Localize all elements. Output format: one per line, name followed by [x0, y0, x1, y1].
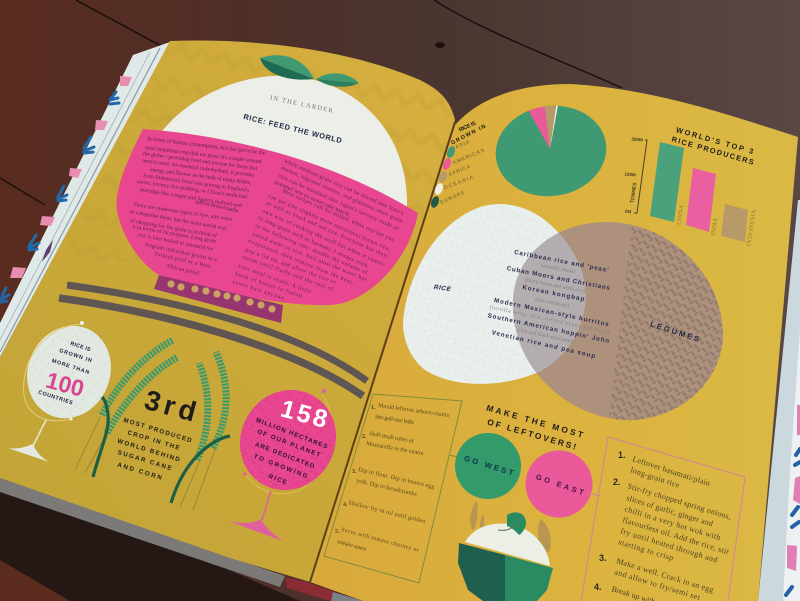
- stat globe: 100 countries: GROWN IN: [58, 348, 92, 364]
- badge: go east: GO EAST: [535, 472, 585, 497]
- stat globe: 158 million hectares: OF OUR PLANET: [256, 428, 321, 459]
- venn diagram: rice and legumes: (actually beans): [541, 262, 576, 275]
- article text: left column: fragrant individual grains in a: [145, 241, 218, 263]
- recipe box: go east: flavourless oil. Add the rice, stir: [621, 515, 731, 556]
- stat globe: 100 countries: [8, 313, 125, 462]
- article text: right column: as well as black and red rice. Everyone has their: [265, 200, 388, 260]
- stat globe: 158 million hectares: MILLION HECTARES: [255, 417, 328, 450]
- bowl foot: [154, 275, 283, 323]
- recipe box: go west: Stuff small cubes of: [369, 430, 414, 445]
- article text: left column: There are numerous types of rice, and ways: [133, 201, 233, 223]
- recipe box: go west: into golf-size balls: [375, 413, 415, 426]
- venn diagram: rice and legumes: (rice and black-eyed peas): [517, 326, 574, 345]
- article text: right column: steam until fluffy and the rest of: [241, 253, 334, 293]
- article text: right column: to long-grain such as basmati, I always stick: [257, 215, 369, 269]
- pie chart legend: rice is grown in: AFRICA: [448, 164, 472, 178]
- article text: right column: Most recipes call for milled, white rice but you: [281, 187, 396, 244]
- article text: right column: [231, 158, 404, 302]
- article text: right column: salted water to rice, boil until the water has: [251, 231, 368, 283]
- article text: right column: can get (the slightly more nutritious) brown rice,: [267, 192, 392, 253]
- bar chart: world's top 3 rice producers: TONNES: [630, 182, 639, 204]
- venn diagram: rice and legumes: Modern Mexican-style burritos: [493, 297, 610, 328]
- bar chart: world's top 3 rice producers: 100M: [624, 172, 636, 178]
- recipe box: go east: long-grain rice: [629, 465, 681, 490]
- article text: left column: In terms of human consumption, rice has got to be the: [147, 135, 266, 157]
- recipe box: go west: 4.: [343, 502, 348, 508]
- heading: make the most of leftovers: MAKE THE MOST: [485, 403, 585, 440]
- article text: left column: of shopping for the grain is to think of: [130, 217, 218, 239]
- recipe box: go east: slices of garlic, ginger and: [625, 493, 714, 528]
- recipe box: go west: 3.: [352, 469, 357, 475]
- bar chart: world's top 3 rice producers: 0M: [625, 209, 632, 214]
- recipe box: go east: Make a well. Crack in an egg: [615, 556, 715, 594]
- article text: right column: never hurt anyone.: [231, 279, 287, 302]
- stat: 3rd most produced crop: WORLD BEHIND: [116, 438, 181, 464]
- icon: small leaf: [316, 73, 359, 87]
- recipe box: go west: 2.: [362, 434, 367, 440]
- recipe box: go east: starting to crisp: [617, 537, 675, 563]
- article text: left column: rice is best boiled or steamed for: [137, 231, 214, 253]
- recipe box: go east: chilli in a very hot wok with: [623, 504, 722, 542]
- recipe box: go west: Serve with tomato chutney or: [340, 527, 419, 554]
- article text: right column: your meal is ready. A little: [237, 263, 312, 295]
- venn diagram: rice and legumes: Venetian rice and pea soup: [491, 329, 596, 360]
- recipe box: go west: Shallow fry in oil until golden: [348, 499, 426, 525]
- recipe box: go east: 3.: [599, 553, 607, 563]
- article text: left column: from Indonesia's fried nasi goreng to England's: [143, 172, 250, 194]
- bar chart: world's top 3 rice producers: RICE PRODUCERS: [671, 135, 755, 167]
- article text: left column: energy and flavour as the bulk of many dishes,: [150, 166, 252, 186]
- bar chart: world's top 3 rice producers: [624, 125, 758, 247]
- stat globe: 158 million hectares: RICE: [267, 473, 288, 486]
- bar chart: world's top 3 rice producers: INDIA: [710, 217, 719, 236]
- article text: right column: while medium-grain rice can be stirred into Italy's: [283, 158, 404, 217]
- stat globe: 100 countries: MORE THAN: [51, 358, 90, 376]
- article text: right column: knob of butter to finish: [234, 270, 303, 300]
- venn diagram: rice and legumes: (tortilla wrap, rice, refried beans and meat): [489, 303, 610, 336]
- badge: go west: [455, 433, 521, 499]
- icon: big leaf: [260, 55, 314, 80]
- venn diagram: rice and legumes: LEGUMES: [649, 319, 700, 344]
- bar chart: world's top 3 rice producers: CHINA: [676, 204, 685, 225]
- venn diagram: rice and legumes: Caribbean rice and 'peas': [514, 249, 610, 274]
- stat globe: 158 million hectares: [222, 372, 354, 541]
- recipe box: go east: Stir-fry chopped spring onions,: [626, 481, 732, 521]
- left page-edge stack with bird and leaf pattern: [0, 42, 170, 357]
- book spine shadow: [310, 122, 455, 582]
- article text: right column: evaporated, then remove from the heat,: [247, 237, 355, 286]
- venn diagram: rice and legumes: Cuban Moors and Christians: [506, 265, 611, 292]
- article text: left column: porridge-like congee and Spain's seafood-and: [140, 186, 243, 209]
- stat globe: 158 million hectares: TO GROWING: [253, 453, 309, 480]
- stat: 3rd most produced crop: 3rd: [141, 384, 200, 428]
- illustration: right rice stalks: [171, 352, 230, 510]
- venn diagram: rice and legumes: [403, 204, 730, 425]
- bar chart: world's top 3 rice producers: INDONESIA: [745, 208, 758, 247]
- venn diagram: rice and legumes: Southern American hoppin' John: [487, 312, 610, 345]
- illustration: rice bowl with steam and leaf: [458, 500, 553, 601]
- article text: left column: most important crop that we grow. It's a staple around: [145, 145, 262, 165]
- pie chart legend: rice is grown in: [429, 120, 487, 209]
- article text: left column: African jollof.: [166, 262, 202, 278]
- pie chart: [496, 106, 606, 196]
- article text: left column: need it most. An essential carbohydrate, it provides: [142, 158, 255, 179]
- title: rice feed the world: RICE: FEED THE WORLD: [243, 112, 343, 145]
- grey hardback cover edge: [0, 478, 363, 601]
- recipe box: go east: fry until heated through and: [619, 526, 719, 564]
- stat globe: 100 countries: COUNTRIES: [37, 390, 74, 407]
- pie chart legend: rice is grown in: RICE IS: [458, 120, 477, 134]
- pie chart legend: rice is grown in: AMERICAS: [452, 147, 486, 166]
- recipe box: go east: 1.: [618, 450, 626, 460]
- right page: [310, 84, 798, 601]
- left page: [0, 41, 455, 582]
- recipe box: go west: [324, 394, 462, 583]
- bar chart: world's top 3 rice producers: 300M: [631, 137, 643, 143]
- article text: right column: pounded into its sweet cake mochi.: [273, 179, 352, 219]
- recipe box: go west: 1.: [371, 405, 376, 411]
- recipe box: go east: and allow to fry/semi set: [613, 567, 702, 601]
- article text: left column: the globe – providing food and income for those that: [143, 150, 258, 172]
- recipe box: go east: 2.: [613, 477, 621, 487]
- venn diagram: rice and legumes: Korean kongbap: [522, 284, 585, 303]
- stat globe: 158 million hectares: 158: [278, 395, 330, 434]
- pie chart legend: rice is grown in: ASIA: [455, 139, 471, 151]
- venn diagram: rice and legumes: RICE: [433, 284, 452, 293]
- pink rice bowl: [117, 129, 418, 305]
- article text: left column: Turkish pilaf or a West: [154, 250, 212, 270]
- badge: go east: [526, 450, 592, 518]
- pie chart legend: rice is grown in: EUROPE: [439, 190, 466, 206]
- stat: 3rd most produced crop: MOST PRODUCED: [122, 417, 193, 444]
- venn diagram: rice and legumes: (black beans and white rice): [525, 276, 586, 295]
- pie chart legend: rice is grown in: GROWN IN: [450, 124, 487, 146]
- stat: 3rd most produced crop: AND CORN: [116, 461, 163, 482]
- article text: left column: [130, 135, 266, 278]
- recipe box: go east: [581, 437, 745, 601]
- article text: left column: sweet, creamy rice pudding, or China's medicinal: [137, 179, 248, 200]
- stat: 3rd most produced crop: SUGAR CANE: [117, 449, 172, 472]
- venn diagram: rice and legumes: (rice and beans): [535, 296, 570, 309]
- illustration: left rice stalks: [75, 340, 178, 477]
- rice dome: [160, 76, 407, 240]
- article text: right column: molten, regional risottos, and glutinous short grain: [280, 165, 403, 225]
- recipe box: go east: 4.: [594, 582, 602, 592]
- article text: left column: saffron-flecked paella.: [195, 198, 241, 214]
- recipe box: go west: 5.: [335, 529, 340, 535]
- article text: right column: pop a lid on, and allow the rice to: [244, 247, 337, 286]
- stat globe: 100 countries: RICE IS: [69, 341, 92, 353]
- heading: make the most of leftovers: OF LEFTOVERS!: [486, 417, 577, 452]
- recipe box: go west: Dip in flour. Dip in beaten egg: [358, 466, 435, 490]
- stat: 3rd most produced crop: CROP IN THE: [127, 429, 180, 452]
- article text: right column: own way of cooking the stuff but when it comes: [261, 207, 385, 268]
- stat: 3rd most produced crop: [116, 384, 200, 482]
- overline: in the larder: IN THE LARDER: [269, 94, 334, 115]
- recipe box: go west: yolk. Dip in breadcrumbs: [356, 478, 418, 498]
- badge: go west: GO WEST: [463, 454, 515, 477]
- pie chart legend: rice is grown in: OCEANIA: [443, 175, 474, 191]
- article text: right column: to the following rule: double the volume of: [254, 222, 368, 276]
- article text: left column: to categorise them, but the most useful way: [130, 208, 228, 232]
- right page-edge stack: [758, 200, 800, 601]
- recipe box: go west: Mould leftover arborio risotto: [378, 402, 450, 419]
- chopsticks: [59, 285, 367, 396]
- stat globe: 158 million hectares: ARE DEDICATED: [254, 441, 316, 470]
- stat globe: 100 countries: 100: [43, 367, 87, 402]
- bar chart: world's top 3 rice producers: WORLD'S TOP 3: [675, 125, 754, 156]
- recipe box: go east: Leftover basamati/plain: [631, 454, 711, 488]
- article text: left column: it in terms of its purpose. Long grain: [132, 223, 217, 245]
- article text: right column: rice can be moulded into Japan's savoury sushi or: [277, 173, 399, 232]
- recipe box: go west: Mozzarella in the centre: [366, 441, 424, 457]
- recipe box: go west: tomato sauce: [336, 539, 367, 553]
